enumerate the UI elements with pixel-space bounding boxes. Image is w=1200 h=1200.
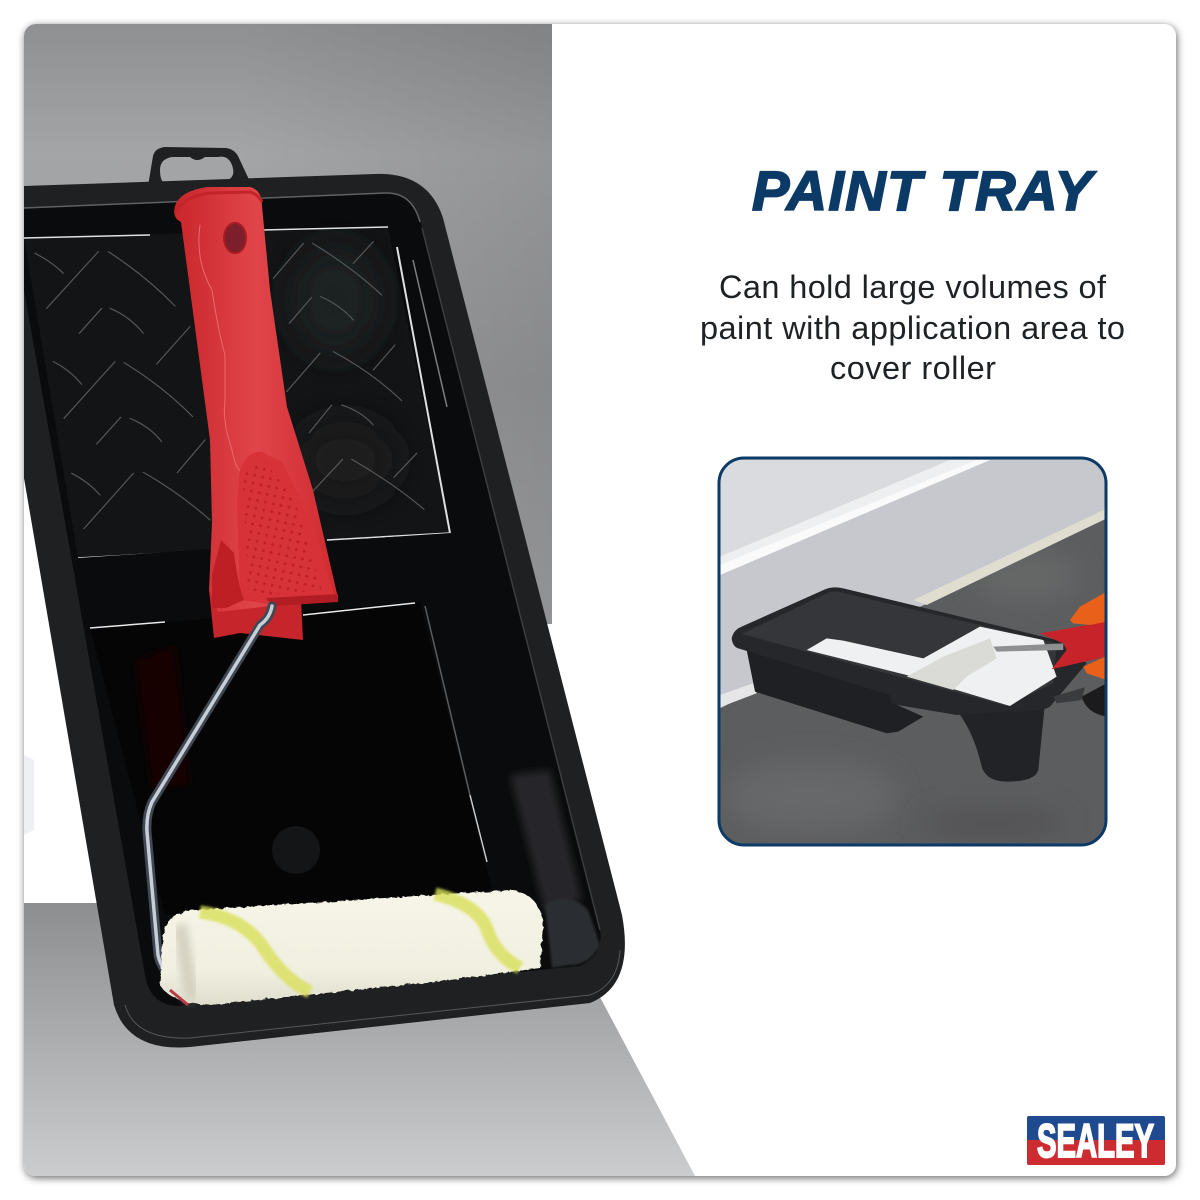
tray outer body (24, 174, 625, 1047)
roller sleeve (160, 890, 543, 1005)
title: PAINT TRAY (752, 159, 1097, 222)
ramp diamond emboss (35, 242, 424, 529)
handle split slot (212, 540, 244, 608)
panel: grey backdrop (24, 24, 695, 1176)
handle hanging hole (224, 223, 246, 253)
tray body (747, 650, 923, 733)
roller wire frame (147, 606, 272, 985)
ramp highlight lines (24, 227, 450, 558)
tray step (78, 533, 450, 559)
tray rim and interior (732, 587, 1087, 715)
tray inner wall (24, 193, 601, 1006)
handle dot texture (243, 461, 322, 596)
photo: tray in use (710, 450, 1115, 855)
well highlight lines (90, 603, 487, 862)
tray well recess (272, 826, 320, 874)
product: paint tray and roller (24, 147, 625, 1047)
tray rim highlight (125, 950, 620, 1038)
tray paint well (90, 602, 492, 915)
tray ramp with diamond pattern (24, 227, 450, 558)
description text (700, 269, 1125, 386)
tray hanging tab (148, 147, 248, 182)
description text: cover roller (830, 350, 996, 386)
tray wall texture (510, 770, 582, 912)
floor (720, 518, 1107, 847)
roller (907, 638, 997, 690)
white paint (807, 627, 1057, 706)
roller handle (174, 187, 338, 640)
red handle (1040, 622, 1107, 669)
handle grip contour (199, 225, 240, 470)
description text: Can hold large volumes of (719, 269, 1107, 305)
description text: paint with application area to (700, 310, 1125, 346)
orange glove (1070, 592, 1107, 625)
tray leg (960, 709, 1044, 782)
